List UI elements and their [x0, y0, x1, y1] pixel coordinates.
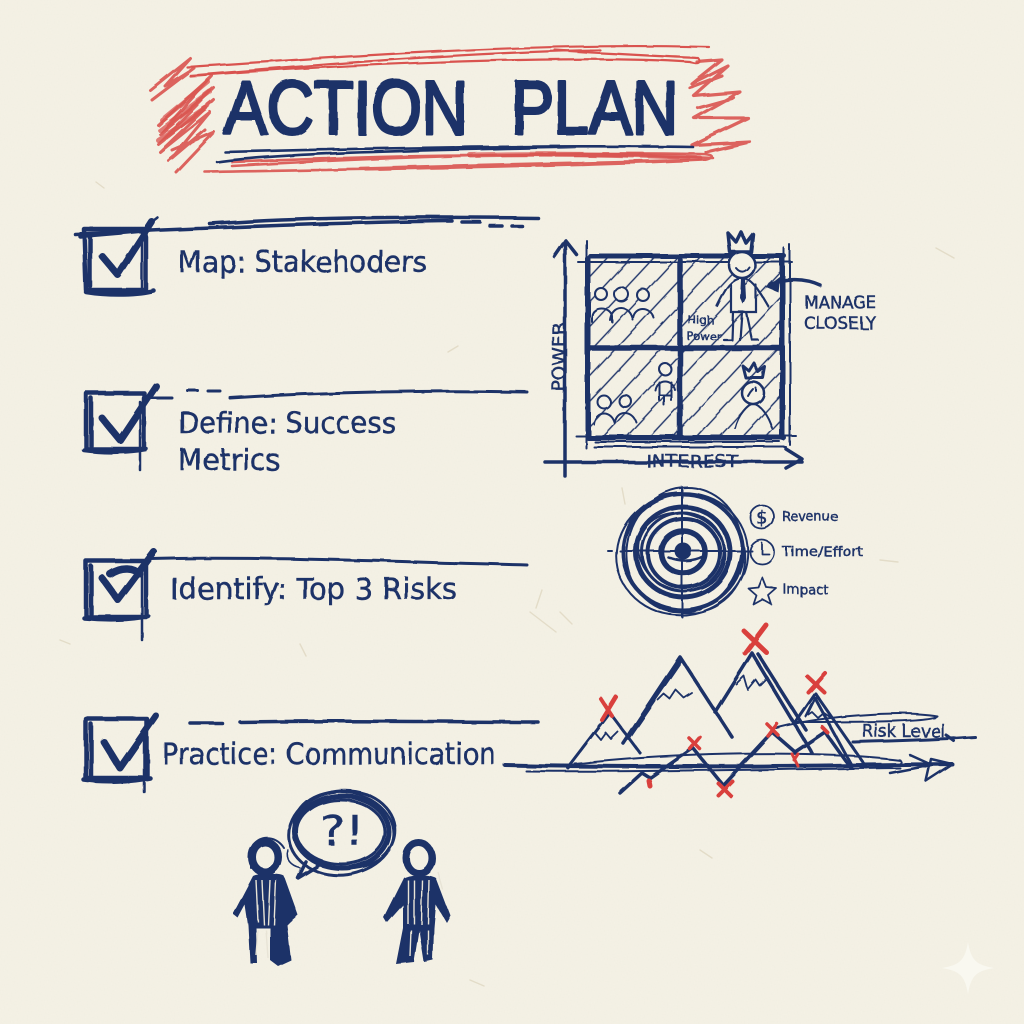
sparkle watermark [942, 942, 994, 994]
metric: revenue: $ [756, 507, 768, 529]
metric: time and effort: Time/Effort [781, 544, 863, 560]
metric: impact [748, 577, 828, 604]
matrix grid [576, 240, 796, 448]
target with metrics [598, 468, 863, 638]
smaller king: bottom-right quadrant [735, 363, 772, 428]
king figure: manage closely [717, 232, 768, 340]
hatched quadrants [588, 258, 782, 436]
target rings [598, 468, 770, 638]
divider line 4 [190, 721, 538, 723]
handwritten note: high power: High [688, 314, 714, 327]
title underline [217, 146, 693, 162]
people: top-left quadrant [592, 287, 654, 322]
checklist item: Map Stakeholders [75, 217, 538, 295]
stakeholder power-interest matrix [545, 232, 877, 476]
axis: interest [545, 449, 802, 472]
checkbox 4 [84, 716, 156, 792]
callout: manage closely: MANAGE [804, 293, 876, 312]
title text [224, 66, 678, 151]
callout: manage closely: CLOSELY [804, 314, 877, 333]
two figures communicating [233, 784, 450, 966]
checklist item: Define Success Metrics: Metrics [178, 443, 280, 477]
risk line [620, 732, 850, 793]
divider line 2 [152, 391, 527, 398]
right person [384, 843, 450, 964]
metric: revenue [750, 505, 838, 529]
risk mountains chart [505, 625, 975, 796]
people: bottom-left quadrant [594, 363, 675, 424]
risk level scale [776, 714, 975, 742]
checklist item: Identify Top 3 Risks [84, 552, 527, 640]
left person [233, 838, 298, 966]
label 2: Define: Success [178, 406, 396, 440]
divider line 1 [75, 217, 538, 234]
speech bubble: ?! [320, 806, 364, 855]
title text: ACTION [224, 66, 468, 151]
metric: time and effort [750, 540, 863, 564]
label 1: Map: Stakehoders [178, 245, 427, 279]
speech bubble [284, 784, 400, 882]
mountain range [568, 653, 867, 768]
divider line 3 [150, 558, 527, 565]
risk level scale: Risk Level [862, 721, 945, 742]
title banner [150, 46, 750, 172]
red scribble frame [150, 46, 750, 172]
handwritten note: high power: Power [687, 330, 721, 343]
axis: power: POWER [549, 322, 570, 392]
checkbox 3 [84, 552, 154, 640]
checklist item: Practice Communication [84, 716, 538, 792]
label 3: Identify: Top 3 Risks [170, 572, 457, 606]
handwritten note: high power [687, 314, 721, 343]
checkbox 1 [80, 218, 158, 295]
checklist item: Define Success Metrics [84, 386, 527, 477]
axis: power [549, 240, 576, 476]
metric: revenue: Revenue [782, 509, 838, 525]
label 4: Practice: Communication [162, 737, 496, 771]
title text: PLAN [511, 66, 678, 151]
checkbox 2 [84, 386, 156, 470]
time axis with arrow [505, 754, 952, 781]
metric: impact: Impact [783, 582, 828, 598]
axis: interest: INTEREST [646, 452, 739, 472]
callout: manage closely [766, 276, 877, 333]
red risk markers [601, 625, 828, 796]
